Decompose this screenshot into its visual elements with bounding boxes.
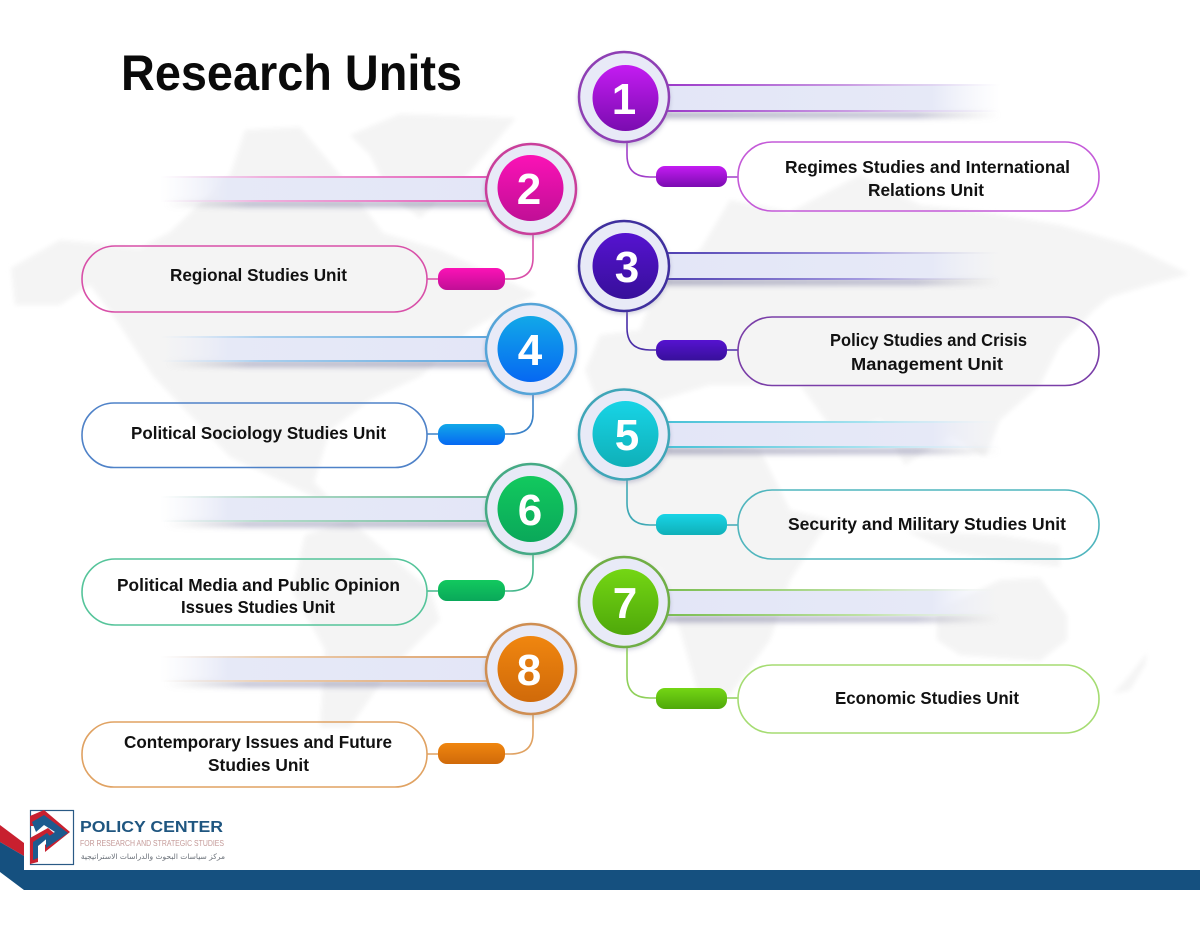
- label box 2: Regional Studies Unit: [170, 265, 347, 285]
- pill 1: [656, 166, 727, 187]
- label box 5: [738, 490, 1099, 559]
- label box 5: Security and Military Studies Unit: [788, 514, 1066, 534]
- number badge 6: [485, 464, 577, 557]
- pill 3: [656, 340, 727, 360]
- bar 3: [660, 252, 1000, 285]
- connector 4: [427, 392, 533, 434]
- label box 8: [82, 722, 427, 787]
- connector 2: [427, 233, 533, 279]
- number badge 3: [578, 221, 670, 314]
- logo subtitle: FOR RESEARCH AND STRATEGIC STUDIES: [80, 839, 224, 848]
- bar 1: [660, 84, 1000, 118]
- bar 8: [160, 656, 500, 687]
- pill 4: [438, 424, 505, 445]
- connector 3: [627, 312, 738, 350]
- number badge 1: [578, 52, 670, 146]
- pill 2: [438, 268, 505, 290]
- number badge 5: [578, 390, 670, 483]
- bar 6: [160, 496, 500, 527]
- label box 8: Contemporary Issues and Future: [124, 732, 392, 752]
- label box 7: [738, 665, 1099, 733]
- label box 3: [738, 317, 1099, 386]
- label box 1: [738, 142, 1099, 211]
- unit 6: [82, 464, 577, 625]
- number badge 2: [485, 144, 577, 237]
- bar 7: [660, 589, 1000, 622]
- connector 7: [627, 648, 738, 698]
- number badge 6: 6: [518, 486, 542, 535]
- bar 5: [660, 421, 1000, 454]
- connector 1: [627, 143, 738, 177]
- bottom band: [0, 825, 1200, 890]
- label box 2: [82, 246, 427, 312]
- number badge 1: 1: [612, 75, 636, 124]
- bar 2: [160, 176, 500, 207]
- logo: [30, 810, 225, 864]
- pill 6: [438, 580, 505, 601]
- label box 6: Issues Studies Unit: [181, 597, 335, 617]
- label box 8: Studies Unit: [208, 755, 309, 775]
- number badge 7: 7: [613, 579, 637, 628]
- bar 4: [160, 336, 500, 367]
- label box 6: Political Media and Public Opinion: [117, 575, 400, 595]
- pill 8: [438, 743, 505, 764]
- unit 2: [82, 144, 577, 312]
- label box 3: Policy Studies and Crisis: [830, 330, 1027, 350]
- number badge 8: 8: [517, 646, 541, 695]
- label box 7: Economic Studies Unit: [835, 688, 1019, 708]
- unit 1: [578, 52, 1099, 211]
- number badge 4: 4: [518, 326, 543, 375]
- unit 4: [82, 304, 577, 468]
- unit 3: [578, 221, 1099, 386]
- connector 6: [427, 552, 533, 591]
- world map background: [11, 114, 1189, 727]
- pill 7: [656, 688, 727, 709]
- title: Research Units: [121, 45, 462, 101]
- connector 5: [627, 480, 738, 525]
- logo mark: [30, 810, 74, 864]
- number badge 2: 2: [517, 165, 541, 214]
- pill 5: [656, 514, 727, 535]
- label box 3: Management Unit: [851, 354, 1003, 374]
- number badge 8: [485, 624, 577, 717]
- label box 1: Relations Unit: [868, 180, 984, 200]
- number badge 7: [578, 557, 670, 650]
- number badge 4: [485, 304, 577, 397]
- number badge 3: 3: [615, 243, 639, 292]
- label box 4: [82, 403, 427, 468]
- unit 5: [578, 390, 1099, 559]
- label box 1: Regimes Studies and International: [785, 157, 1070, 177]
- label box 4: Political Sociology Studies Unit: [131, 423, 386, 443]
- logo arabic subtitle: مركز سياسات البحوث والدراسات الاستراتيجية: [81, 852, 225, 861]
- unit 7: [578, 557, 1099, 733]
- label box 6: [82, 559, 427, 625]
- connector 8: [427, 711, 533, 754]
- unit 8: [82, 624, 577, 787]
- logo name: POLICY CENTER: [80, 819, 223, 836]
- number badge 5: 5: [615, 411, 639, 460]
